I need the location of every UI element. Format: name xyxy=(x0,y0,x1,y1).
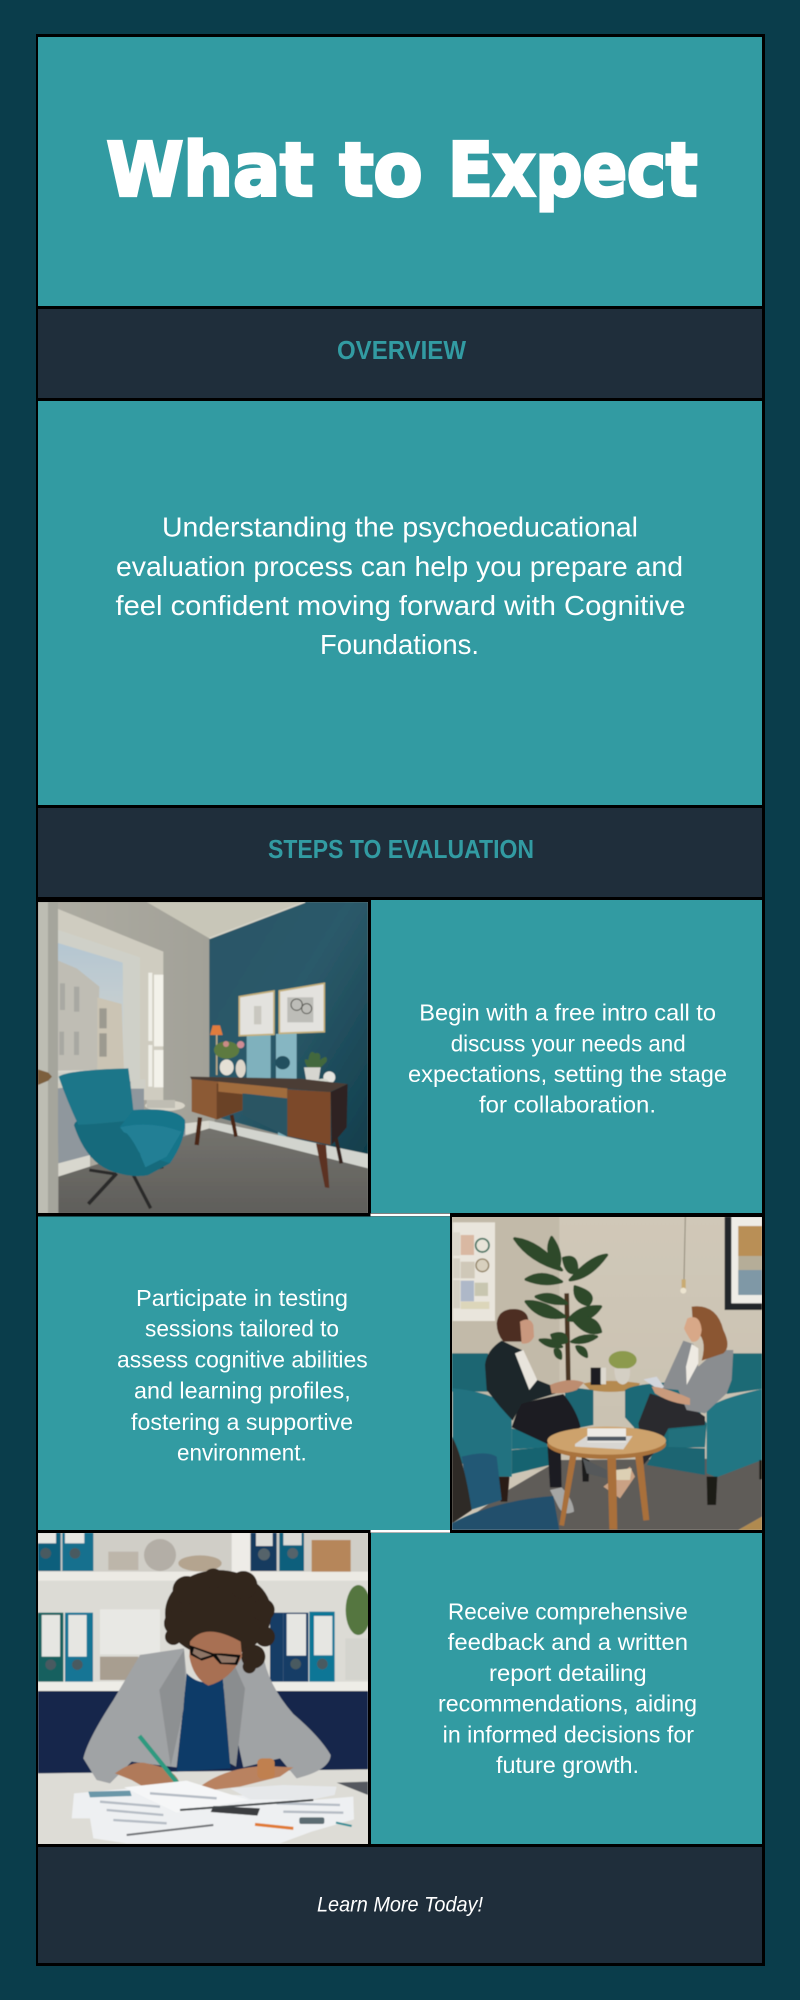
panel: step 2 text: assess cognitive abilities xyxy=(117,1347,368,1373)
panel: steps heading xyxy=(38,808,762,897)
photo: office room with armchair and desk xyxy=(38,902,368,1213)
panel: step 1 text: expectations, setting the stage xyxy=(408,1061,727,1087)
panel: step 3 text: report detailing xyxy=(489,1660,647,1686)
title xyxy=(106,128,698,214)
footer call to action: Learn More Today! xyxy=(317,1894,483,1916)
photo: woman reviewing documents at desk xyxy=(38,1533,371,1844)
panel: overview text xyxy=(38,401,762,805)
panel: step 1 text: for collaboration. xyxy=(479,1092,656,1118)
panel: step 1 text: Begin with a free intro call to xyxy=(419,1000,716,1026)
panel: step 3 text: recommendations, aiding xyxy=(438,1691,697,1717)
panel: step 2 text: environment. xyxy=(177,1440,307,1466)
title: Expect xyxy=(448,128,698,214)
title: to xyxy=(340,128,422,214)
panel: step 3 text: feedback and a written xyxy=(448,1629,688,1655)
divider: white rule below step 2 xyxy=(370,1530,450,1533)
panel: title xyxy=(38,37,762,306)
overview paragraph: evaluation process can help you prepare and xyxy=(116,551,683,582)
panel: step 2 text xyxy=(38,1216,450,1530)
overview paragraph: feel confident moving forward with Cognitive xyxy=(116,590,685,621)
title: What xyxy=(106,128,314,214)
panel: footer xyxy=(38,1847,762,1963)
panel: step 2 text: Participate in testing xyxy=(136,1285,348,1311)
panel: step 1 text xyxy=(371,900,762,1213)
panel: step 2 text: and learning profiles, xyxy=(134,1378,351,1404)
panel: step 3 text: Receive comprehensive xyxy=(448,1598,688,1624)
photo: two women talking in teal armchairs xyxy=(452,1217,762,1530)
panel: step 1 text: discuss your needs and xyxy=(451,1030,686,1056)
panel: step 3 text xyxy=(371,1533,762,1844)
panel: step 3 text: future growth. xyxy=(496,1752,639,1778)
panel: step 2 text: sessions tailored to xyxy=(145,1316,339,1342)
panel: step 2 text: fostering a supportive xyxy=(131,1409,353,1435)
overview paragraph: Foundations. xyxy=(320,629,479,660)
heading: overview: OVERVIEW xyxy=(337,337,467,365)
heading: steps to evaluation: STEPS TO EVALUATION xyxy=(268,836,534,864)
panel: step 3 text: in informed decisions for xyxy=(443,1722,694,1748)
panel: overview heading xyxy=(38,309,762,398)
divider: white rule above step 2 xyxy=(370,1214,450,1216)
overview paragraph: Understanding the psychoeducational xyxy=(162,512,638,542)
overview paragraph xyxy=(116,512,685,660)
